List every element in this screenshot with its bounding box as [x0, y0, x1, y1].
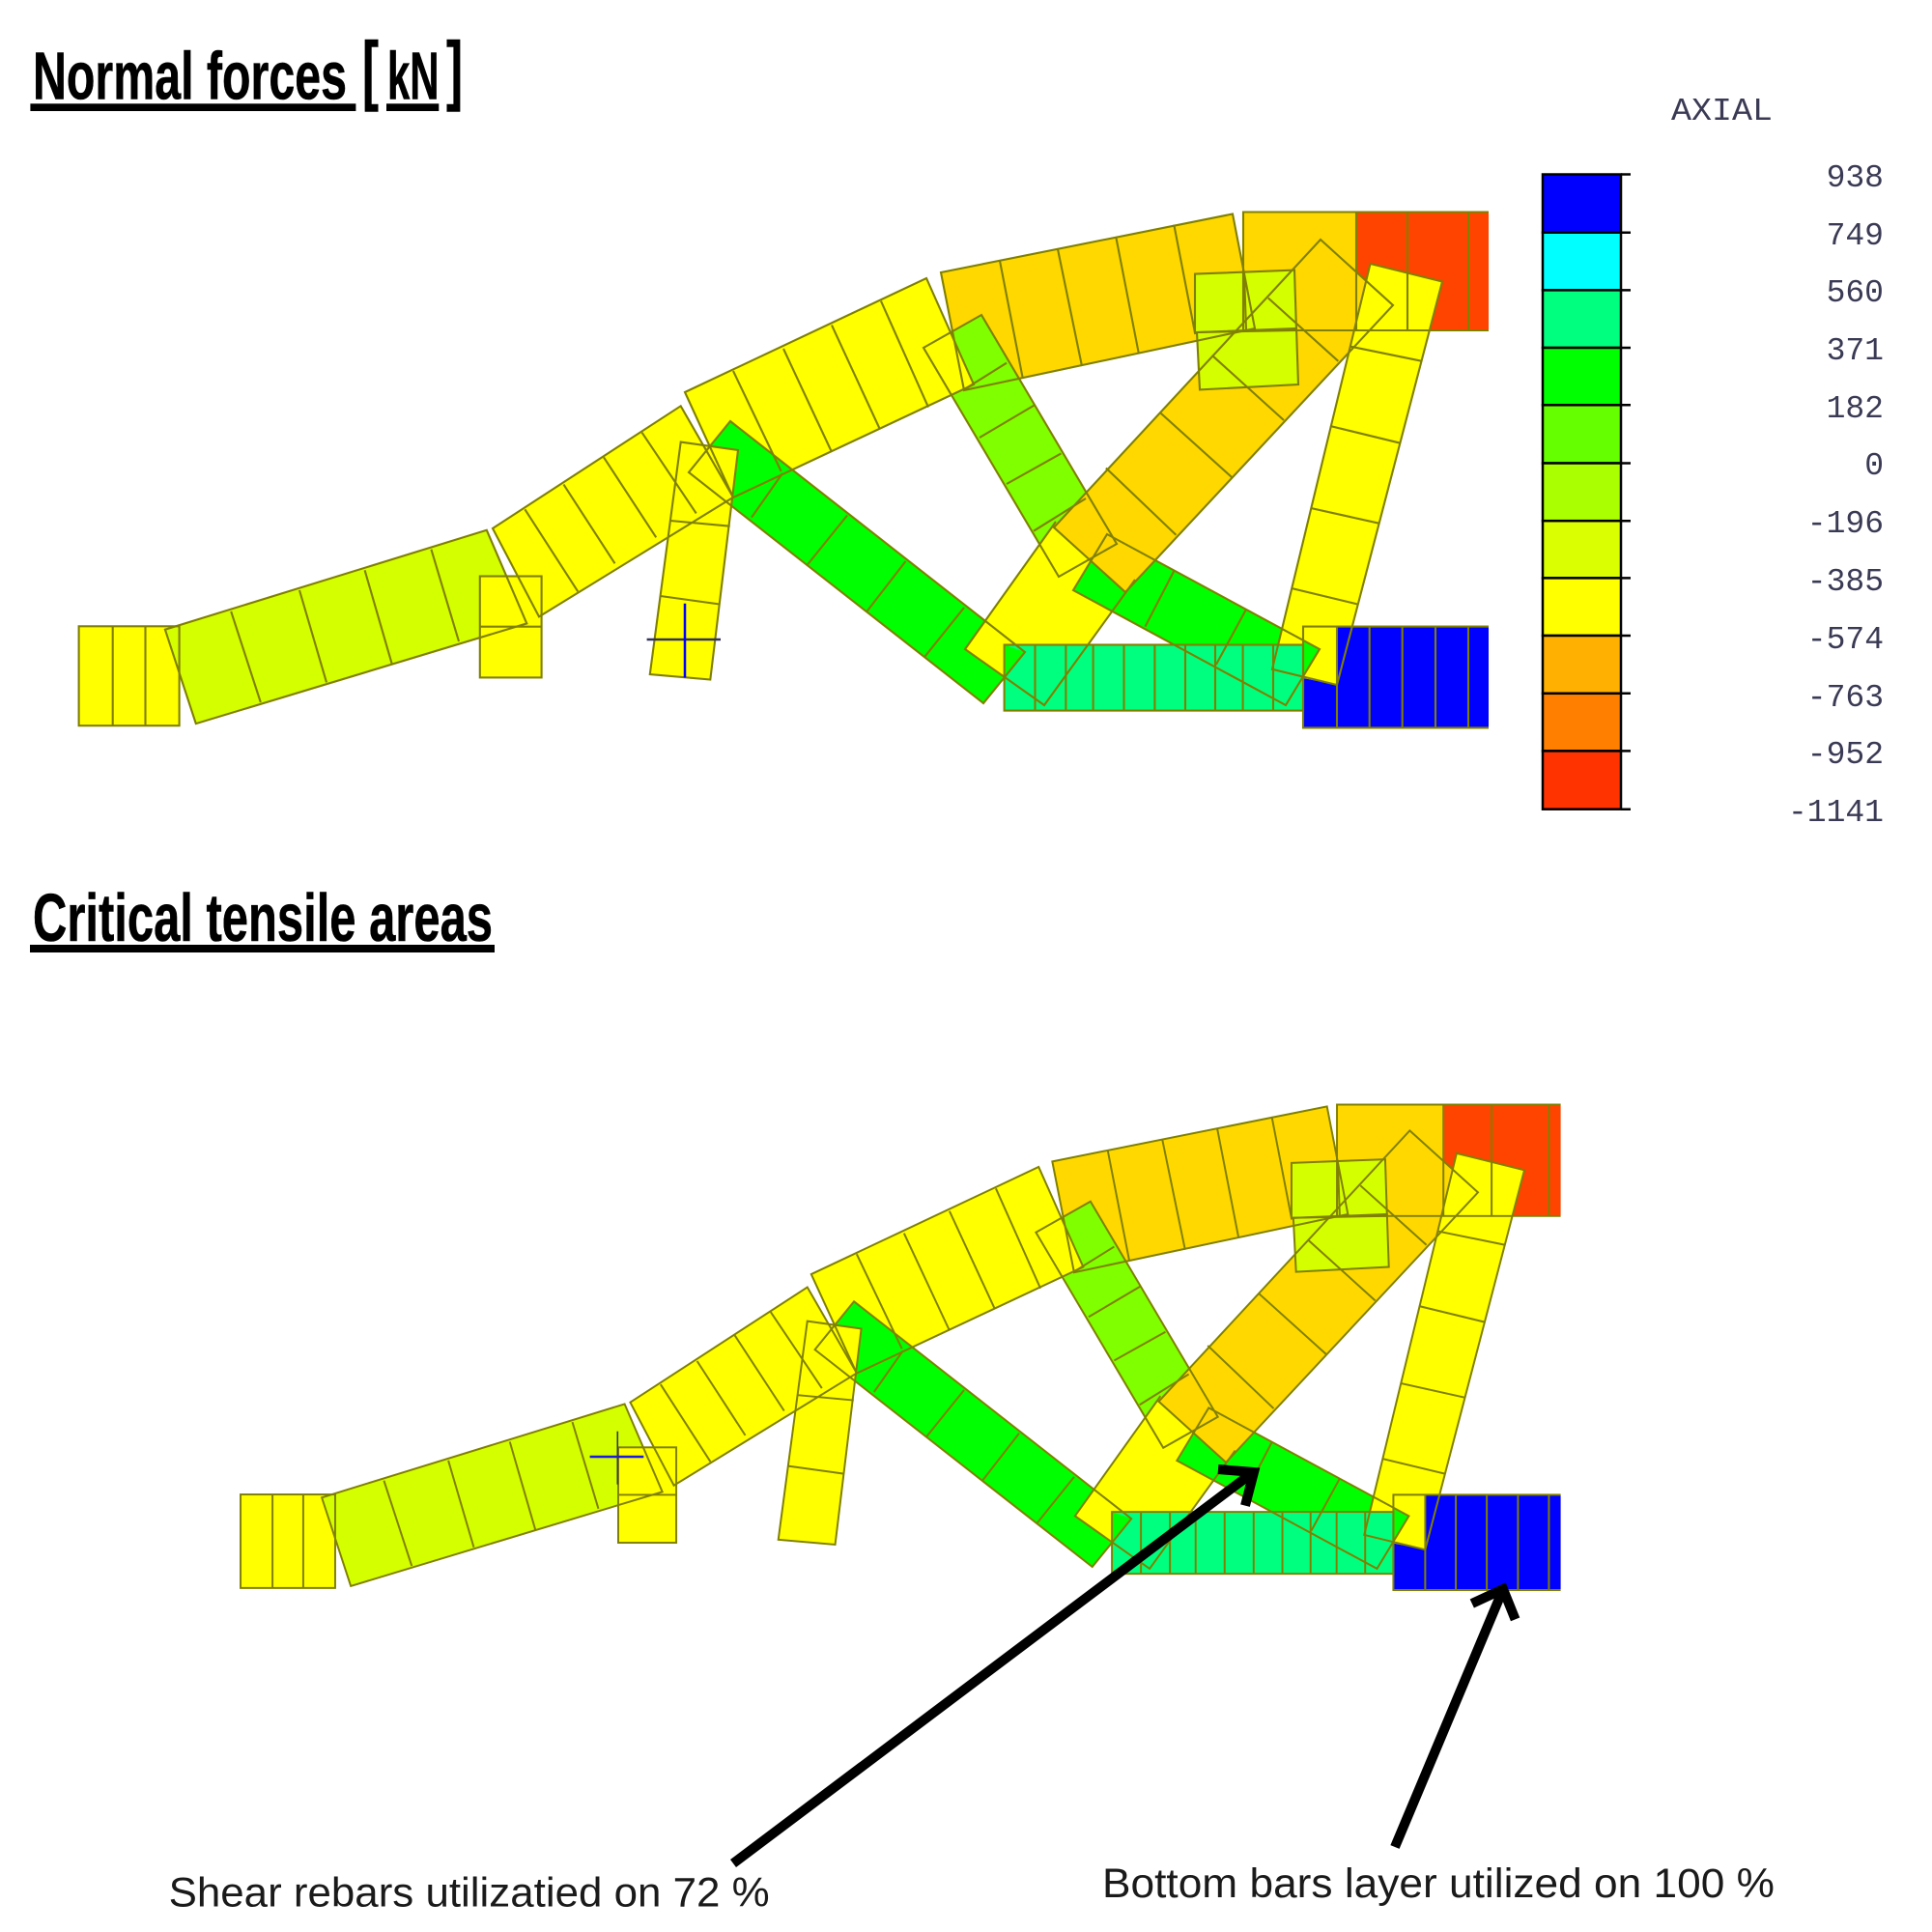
caption: bottom bars: Bottom bars layer utilized on 100 %: [1102, 1861, 1775, 1907]
bottom tension chord: [1005, 645, 1303, 711]
scale values: 749: [1827, 218, 1884, 254]
scale values: 182: [1827, 391, 1884, 427]
scale values: -196: [1807, 506, 1884, 542]
left support block: [79, 626, 180, 725]
scale values: 938: [1827, 160, 1884, 196]
heading: Critical tensile areas: [30, 880, 495, 955]
cursor cross, bottom diagram: [590, 1432, 643, 1485]
scale values: 560: [1827, 275, 1884, 311]
caption: shear rebars: Shear rebars utilizatied on 72 %: [169, 1869, 770, 1916]
legend title: AXIAL: [1671, 94, 1773, 129]
green tip over chord: [1005, 645, 1025, 678]
colour bands: [1543, 174, 1631, 810]
light green strut: [923, 315, 1117, 577]
scale values: [1788, 160, 1884, 831]
right crop of bottom diagram: [1561, 1092, 1590, 1604]
yellow node in blue block: [1303, 627, 1337, 685]
heading: Normal forces [kN]: [: [362, 26, 379, 112]
heading: Normal forces [kN]: kN: [387, 39, 439, 114]
lime node upper: [1195, 270, 1296, 332]
vertical post 1: [480, 576, 542, 677]
middle chord segment: [685, 278, 974, 497]
top support block, red part: [1356, 213, 1489, 330]
heading: Normal forces [kN]: ]: [446, 26, 463, 112]
element wireframe: [79, 213, 1489, 727]
scale values: 371: [1827, 333, 1884, 369]
lower chord segment 2: [493, 406, 733, 616]
scale values: -763: [1807, 680, 1884, 716]
green diagonal tie: [689, 421, 1025, 703]
arrow: to bottom bars: [1395, 1589, 1516, 1847]
scale values: -385: [1807, 564, 1884, 600]
yellow right column: [1272, 264, 1442, 685]
lower chord segment 1: [165, 530, 526, 724]
heading: Normal forces [kN]: Normal forces: [33, 39, 347, 114]
scale values: -952: [1807, 737, 1884, 773]
legend: AXIAL colour scale: [1543, 94, 1884, 831]
arrow: to shear rebars: [733, 1469, 1254, 1863]
scale values: -1141: [1788, 795, 1884, 831]
slanted post 2: [650, 442, 738, 680]
gold diagonal strut: [1054, 240, 1393, 592]
truss diagram: critical tensile areas: [241, 1105, 1568, 1590]
cursor cross, top diagram: [647, 604, 721, 678]
green lower tie: [1073, 534, 1320, 705]
yellow diagonal strut: [965, 522, 1135, 705]
heading: Critical tensile areas: Critical tensile areas: [33, 880, 493, 955]
lime node lower: [1197, 328, 1298, 389]
top support block, gold part: [1243, 213, 1356, 330]
blue tensile block: [1303, 627, 1489, 727]
upper chord segment: [941, 214, 1255, 390]
scale values: 0: [1864, 448, 1884, 484]
green tip over yellow node: [1303, 640, 1320, 676]
scale values: -574: [1807, 622, 1884, 658]
truss diagram: axial forces: [79, 213, 1489, 727]
